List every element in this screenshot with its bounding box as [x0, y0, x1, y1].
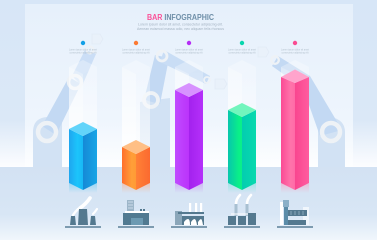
- floor: [0, 167, 377, 240]
- bar 2: orange: [122, 140, 150, 193]
- marker and label 4: [228, 41, 256, 54]
- marker and label 2: consectetur adipiscing elit: [122, 52, 150, 54]
- marker and label 4: consectetur adipiscing elit: [228, 52, 256, 54]
- ghost column 4: [228, 60, 256, 167]
- marker and label 4: Lorem ipsum dolor sit amet: [228, 48, 256, 52]
- bar 4: green: [228, 103, 256, 193]
- ghost column 3: [175, 60, 203, 167]
- subtitle: Lorem ipsum dolor sit amet, consectetur adipiscing elit.: [138, 22, 223, 26]
- marker and label 5: consectetur adipiscing elit: [282, 52, 309, 54]
- back panel: [25, 4, 353, 167]
- marker and label 1: [69, 41, 97, 54]
- bar 3: purple: [175, 83, 203, 193]
- icon: cooling towers: [65, 198, 101, 228]
- robot arm: right: [258, 47, 345, 167]
- robot arm: left: [33, 34, 103, 167]
- marker and label 2: Lorem ipsum dolor sit amet: [122, 48, 150, 52]
- ghost column 1: [69, 60, 97, 167]
- marker and label 1: Lorem ipsum dolor sit amet: [69, 48, 97, 52]
- marker and label 3: [175, 41, 203, 54]
- marker and label 1: consectetur adipiscing elit: [70, 52, 97, 54]
- bar 1: blue: [69, 122, 97, 193]
- subtitle: [137, 22, 224, 31]
- marker and label 3: Lorem ipsum dolor sit amet: [175, 48, 203, 52]
- subtitle: Aenean euismod massa odio, nec aliquam felis rhoncus: [137, 27, 224, 31]
- robot arm: centre: [140, 50, 227, 167]
- marker and label 2: [122, 41, 150, 54]
- icon: industrial rack: [277, 200, 313, 228]
- background wall: [0, 0, 377, 167]
- icon: power plant chimneys: [224, 195, 260, 228]
- icon: factory building: [118, 200, 154, 228]
- marker and label 5: [281, 41, 309, 54]
- marker and label 3: consectetur adipiscing elit: [176, 52, 203, 54]
- ghost column 5: [281, 60, 309, 167]
- title: BAR INFOGRAPHIC: [147, 13, 214, 22]
- ghost column 2: [122, 60, 150, 167]
- marker and label 5: Lorem ipsum dolor sit amet: [281, 48, 309, 52]
- icon: refinery arches: [171, 203, 207, 228]
- bar 5: pink: [281, 70, 309, 193]
